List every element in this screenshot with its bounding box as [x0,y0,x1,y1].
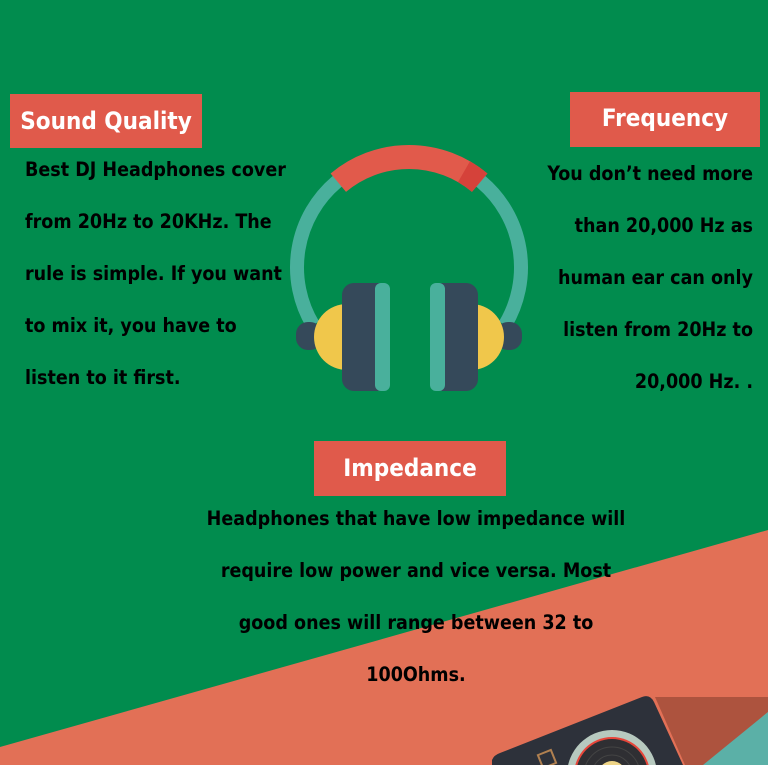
text: impedance body: require low power and vice versa. Most [221,559,611,582]
text: frequency body: listen from 20Hz to [563,318,753,341]
heading: Frequency: Frequency [602,104,728,132]
text: frequency body: than 20,000 Hz as [575,214,753,237]
text: sound quality body: Best DJ Headphones cover [25,158,286,181]
icon: dj controller [492,696,768,765]
heading: Sound Quality [10,94,202,148]
icon: headphones [290,145,528,391]
text: frequency body: human ear can only [558,266,753,289]
text: sound quality body: to mix it, you have to [25,314,237,337]
text: sound quality body: listen to it first. [25,366,181,389]
heading: Sound Quality: Sound Quality [20,107,192,135]
text: impedance body: Headphones that have low impedance will [207,507,625,530]
text: frequency body: 20,000 Hz. . [635,370,753,393]
text: sound quality body: from 20Hz to 20KHz. The [25,210,272,233]
heading: Impedance: Impedance [343,454,477,482]
text: sound quality body [25,158,286,389]
text: impedance body: good ones will range between 32 to [239,611,593,634]
heading: Frequency [570,92,760,147]
text: impedance body [207,507,625,686]
text: sound quality body: rule is simple. If you want [25,262,282,285]
heading: Impedance [314,441,506,496]
text: impedance body: 100Ohms. [366,663,466,686]
text: frequency body: You don’t need more [547,162,753,185]
text: frequency body [547,162,753,393]
